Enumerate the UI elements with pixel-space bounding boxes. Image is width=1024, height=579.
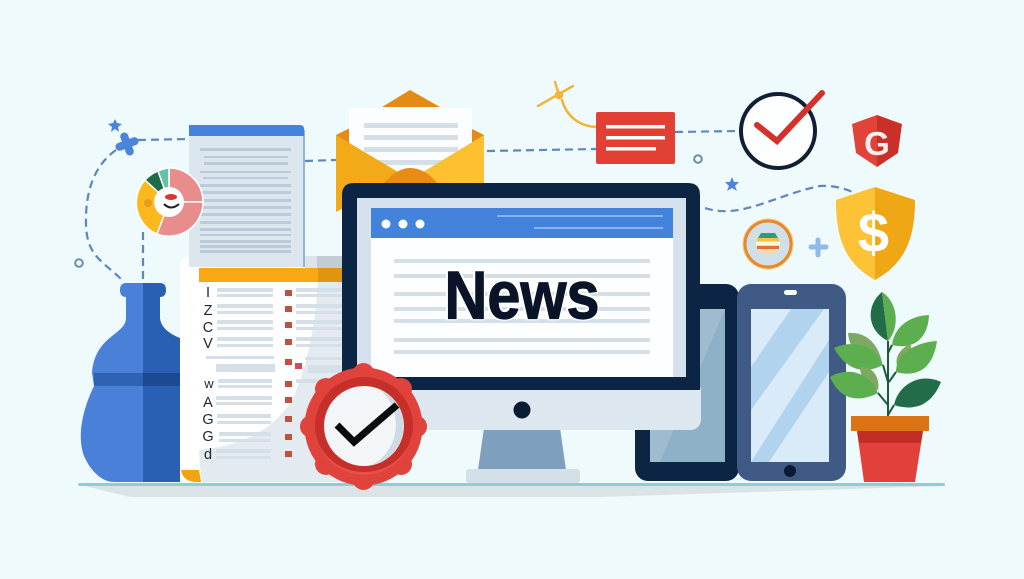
list letters: G: [202, 412, 214, 428]
heading bar: [199, 268, 345, 282]
icon: red check badge: [300, 363, 427, 490]
icon: small ring left: [75, 259, 83, 267]
panel: checklist paper: [180, 256, 345, 482]
icon: red message card: [596, 112, 675, 164]
pot: [857, 431, 923, 482]
list markers: [285, 290, 302, 457]
chart: donut: [136, 168, 203, 236]
icon: star right: [725, 177, 739, 191]
plant: [830, 292, 941, 482]
title: News: [444, 258, 600, 334]
article lines: [394, 259, 650, 354]
list letters: w: [203, 376, 214, 391]
monitor frame: [342, 183, 700, 390]
panel: blue header document: [189, 125, 305, 267]
shelf: [78, 483, 945, 497]
list letters: [202, 285, 214, 463]
icon: circular stack badge: [743, 219, 793, 269]
list letters: G: [202, 429, 214, 445]
icon: light blue plus: [811, 240, 826, 255]
icon: G hexagon badge: G: [864, 125, 890, 162]
list letters: I: [206, 285, 210, 301]
list letters: C: [203, 320, 213, 336]
document lines: [200, 148, 291, 253]
phone: [737, 284, 846, 481]
monitor chin: [342, 388, 701, 430]
connector lines: [86, 131, 856, 284]
icon: small ring right: [694, 155, 702, 163]
list letters: Z: [204, 303, 213, 319]
list letters: V: [203, 336, 213, 352]
icon: dollar shield: $: [858, 201, 889, 264]
icon: blue star: [108, 119, 122, 132]
tablet: [635, 284, 739, 481]
browser bar: [371, 208, 673, 238]
icon: envelope: [336, 90, 484, 212]
leaves: [830, 292, 941, 407]
icon: G hexagon badge: [852, 115, 902, 167]
monitor: [342, 183, 701, 483]
icon: check circle: [741, 93, 822, 168]
list letters: A: [203, 395, 213, 411]
stem: [878, 341, 896, 416]
list letters: d: [204, 447, 212, 463]
icon: blue cross: [117, 134, 137, 154]
icon: dollar shield: [836, 187, 915, 280]
monitor stand: [478, 428, 566, 470]
icon: blue vase: [81, 283, 180, 482]
monitor camera: [514, 402, 530, 418]
icon: orange spark with link: [538, 82, 596, 127]
list lines: [206, 288, 342, 459]
letter: [349, 108, 472, 188]
